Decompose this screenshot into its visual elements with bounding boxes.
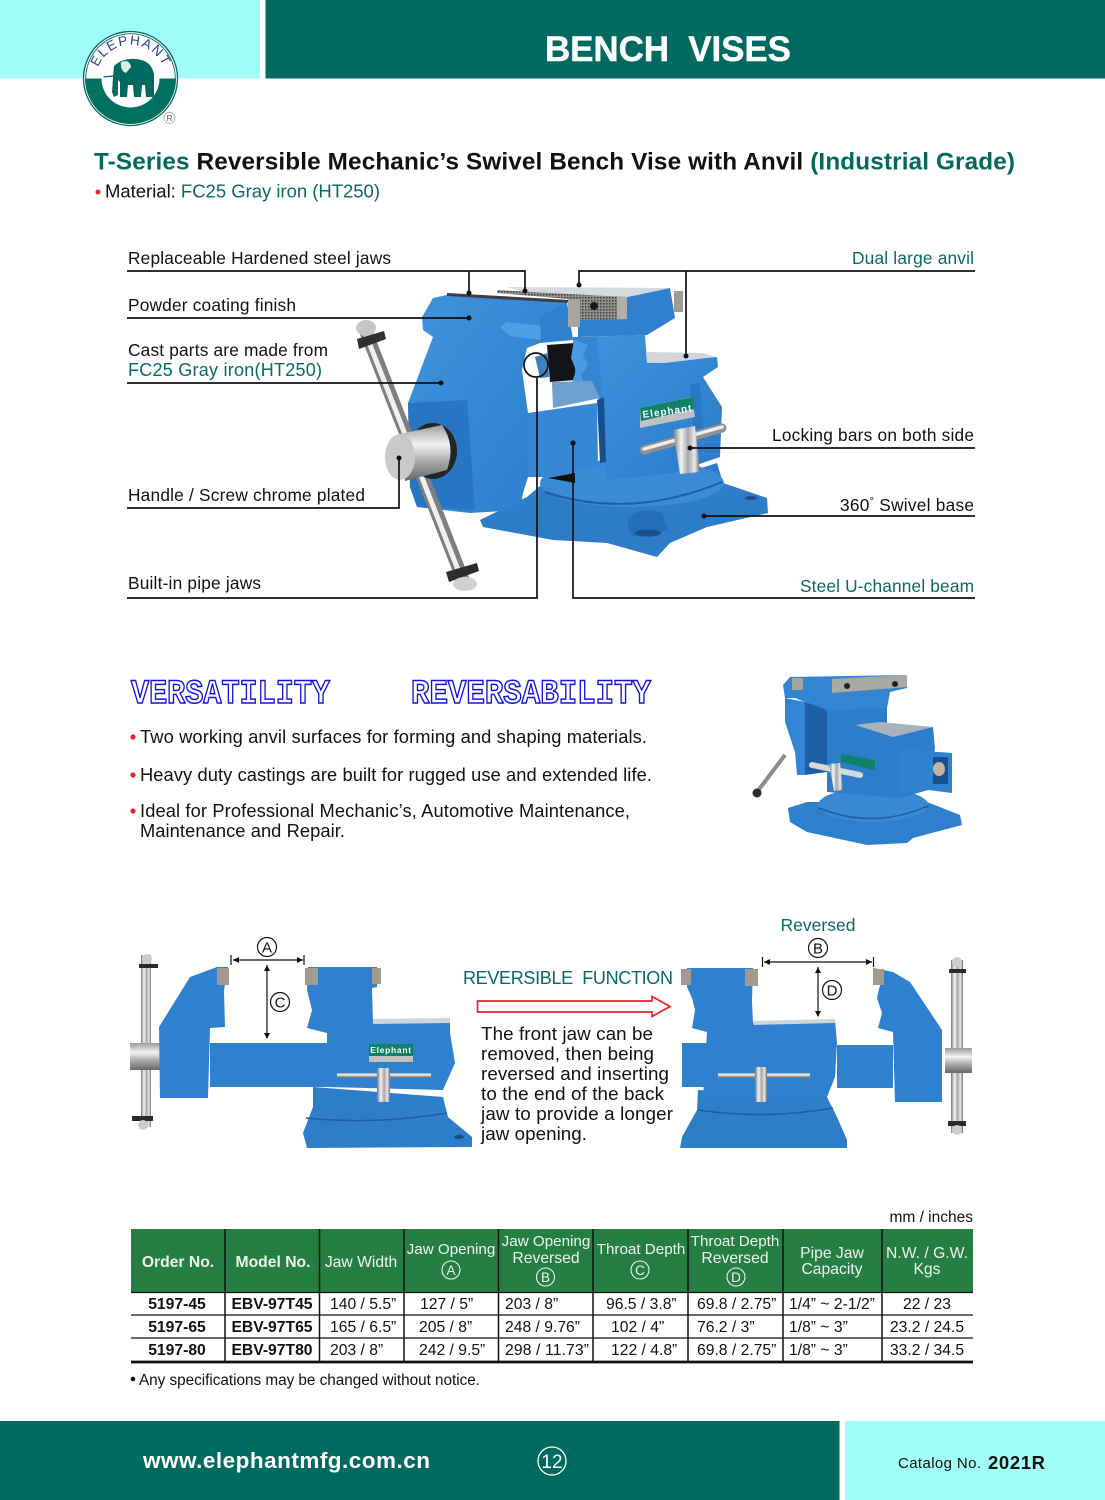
row 5197-80 xyxy=(148,1342,964,1359)
row 5197-80: 5197-80 xyxy=(148,1342,206,1359)
reversible explanation text: removed, then being xyxy=(481,1043,654,1064)
dimension: jaw opening a and throat c: C xyxy=(275,994,286,1012)
table header: Reversed xyxy=(512,1250,580,1267)
main product photo: bench vise xyxy=(356,287,768,591)
back jaw block xyxy=(578,288,675,337)
heading: versatility reversability xyxy=(131,676,652,714)
table header: A xyxy=(446,1263,456,1278)
callout: replaceable jaws xyxy=(127,248,528,296)
handle xyxy=(951,960,963,1133)
table header: Pipe Jaw xyxy=(800,1245,864,1262)
front jaw xyxy=(159,967,228,1098)
steel jaw face xyxy=(497,290,627,320)
row 5197-45: 140 / 5.5” xyxy=(330,1296,396,1313)
material line: Material: FC25 Gray iron (HT250) xyxy=(105,180,380,202)
row 5197-65: 23.2 / 24.5 xyxy=(890,1319,964,1336)
beam xyxy=(552,381,600,408)
callout: cast parts: FC25 Gray iron(HT250) xyxy=(128,360,322,380)
logo: elephant badge: R xyxy=(167,114,173,123)
callout: handle and screw xyxy=(127,456,402,508)
base xyxy=(303,1087,472,1148)
table header: Model No. xyxy=(236,1254,310,1271)
row 5197-65: 1/8” ~ 3” xyxy=(789,1319,848,1336)
diagram: vise normal position xyxy=(130,954,472,1148)
callout: swivel base: Swivel base xyxy=(874,495,974,515)
row 5197-45: 203 / 8” xyxy=(505,1296,558,1313)
reversible function heading: REVERSIBLE FUNCTION xyxy=(463,968,673,988)
black wedge xyxy=(548,473,575,483)
table header: N.W. / G.W. xyxy=(886,1245,968,1262)
dimension: jaw opening a and throat c: A xyxy=(262,940,272,956)
base xyxy=(680,1090,847,1148)
screw hub xyxy=(409,423,457,479)
row 5197-45: 5197-45 xyxy=(148,1296,206,1313)
header band xyxy=(0,0,1105,78)
handle rod and knobs xyxy=(366,332,463,580)
table header: C xyxy=(635,1263,645,1278)
feature bullet list: Heavy duty castings are built for rugged use and extended life. xyxy=(140,764,652,785)
row 5197-65: 248 / 9.76” xyxy=(505,1319,580,1336)
table header: Kgs xyxy=(913,1261,941,1278)
logo: elephant badge: ELEPHANT xyxy=(90,35,171,66)
row 5197-45 xyxy=(148,1296,951,1313)
reversible explanation text: jaw to provide a longer xyxy=(480,1103,673,1124)
rear body xyxy=(583,335,722,480)
row 5197-80: 298 / 11.73” xyxy=(505,1342,589,1359)
title: T-Series Reversible Mechanic’s Swivel Bench Vise with Anvil (Industrial Grade) xyxy=(94,148,1015,176)
row 5197-80: 122 / 4.8” xyxy=(611,1342,677,1359)
locking bar xyxy=(644,428,722,450)
table grid xyxy=(131,1229,973,1362)
logo: elephant badge xyxy=(82,30,178,126)
row 5197-45: 96.5 / 3.8” xyxy=(606,1296,677,1313)
callout: dual anvil xyxy=(576,248,975,358)
table header: Capacity xyxy=(801,1261,863,1278)
row 5197-80: EBV-97T80 xyxy=(231,1342,313,1359)
table header: B xyxy=(541,1270,550,1285)
callout: powder coating: Powder coating finish xyxy=(128,295,296,315)
handle xyxy=(141,955,151,1127)
dimension: reversed jaw opening b and throat d xyxy=(762,915,874,1017)
row 5197-45: 1/4” ~ 2-1/2” xyxy=(789,1296,875,1313)
diagram: vise reversed position xyxy=(680,957,972,1148)
table header: Order No. xyxy=(142,1254,214,1271)
table header: Reversed xyxy=(701,1250,769,1267)
callout: replaceable jaws: Replaceable Hardened steel jaws xyxy=(128,248,391,268)
base xyxy=(480,463,768,557)
reversible explanation text: jaw opening. xyxy=(480,1123,587,1144)
callout: u-channel beam xyxy=(570,440,975,598)
front jaw xyxy=(873,968,942,1102)
arrow: red outline xyxy=(478,996,670,1016)
locking bar xyxy=(337,1073,431,1078)
photo: vise rear view xyxy=(752,675,962,845)
units note: mm / inches xyxy=(889,1209,973,1226)
callout: pipe jaws xyxy=(127,353,548,598)
specifications note: Any specifications may be changed without notice. xyxy=(139,1372,480,1389)
table header: Jaw Width xyxy=(325,1254,397,1271)
row 5197-80: 69.8 / 2.75” xyxy=(697,1342,776,1359)
nameplate xyxy=(640,397,695,428)
feature bullet list: Two working anvil surfaces for forming and shaping materials. xyxy=(140,726,647,747)
callout: powder coating xyxy=(127,295,472,320)
front jaw xyxy=(408,295,573,513)
reversible explanation text: to the end of the back xyxy=(481,1083,665,1104)
feature bullet list: Maintenance and Repair. xyxy=(140,820,345,841)
main product photo: bench vise: Elephant xyxy=(642,403,693,421)
beam xyxy=(210,1043,327,1087)
table header xyxy=(131,1229,973,1292)
diagram: vise normal position: Elephant xyxy=(370,1045,412,1055)
reversible explanation text: reversed and inserting xyxy=(481,1063,669,1084)
row 5197-45: 22 / 23 xyxy=(903,1296,951,1313)
callout: swivel base: ° xyxy=(870,496,874,508)
callout: swivel base xyxy=(702,495,975,518)
catalog number: Catalog No. xyxy=(898,1455,981,1472)
dimension: jaw opening a and throat c xyxy=(231,938,304,1039)
feature bullet list: Ideal for Professional Mechanic’s, Automotive Maintenance, xyxy=(140,800,630,821)
callout: u-channel beam: Steel U-channel beam xyxy=(800,576,974,596)
page number: 12 xyxy=(541,1452,563,1473)
heading: versatility reversability: REVERSABILITY xyxy=(411,676,652,714)
specifications table xyxy=(131,1229,973,1362)
dimension: reversed jaw opening b and throat d: D xyxy=(827,982,838,1000)
row 5197-65 xyxy=(148,1319,964,1336)
row 5197-65: 205 / 8” xyxy=(419,1319,472,1336)
row 5197-65: 5197-65 xyxy=(148,1319,206,1336)
callout: locking bars: Locking bars on both side xyxy=(772,425,974,445)
table header: Throat Depth xyxy=(597,1241,685,1258)
table header: D xyxy=(731,1270,741,1285)
row 5197-80: 33.2 / 34.5 xyxy=(890,1342,964,1359)
row 5197-45: 69.8 / 2.75” xyxy=(697,1296,776,1313)
callout: locking bars xyxy=(688,425,975,450)
row 5197-80: 203 / 8” xyxy=(330,1342,383,1359)
footer band xyxy=(0,1421,1105,1500)
callouts left xyxy=(127,248,975,598)
heading: bench vises: BENCH VISES xyxy=(545,30,791,69)
row 5197-80: 242 / 9.5” xyxy=(419,1342,485,1359)
callout: cast parts xyxy=(127,340,444,386)
locking bar xyxy=(718,1073,810,1078)
callout: dual anvil: Dual large anvil xyxy=(852,248,974,268)
reversible explanation text xyxy=(480,1023,673,1144)
row 5197-65: 165 / 6.5” xyxy=(330,1319,396,1336)
website: www.elephantmfg.com.cn xyxy=(142,1448,430,1473)
table header: Jaw Opening xyxy=(502,1233,590,1250)
body xyxy=(687,968,837,1097)
row 5197-65: EBV-97T65 xyxy=(231,1319,313,1336)
row 5197-65: 76.2 / 3” xyxy=(697,1319,755,1336)
dimension: reversed jaw opening b and throat d: Reversed xyxy=(781,915,855,935)
callout: pipe jaws: Built-in pipe jaws xyxy=(128,573,261,593)
beams xyxy=(682,1043,707,1087)
table header: Throat Depth xyxy=(691,1233,779,1250)
row 5197-45: 127 / 5” xyxy=(420,1296,473,1313)
callout: handle and screw: Handle / Screw chrome plated xyxy=(128,485,365,505)
nameplate xyxy=(369,1044,413,1056)
body xyxy=(307,967,455,1090)
footer band: 2021R xyxy=(988,1452,1045,1473)
row 5197-45: EBV-97T45 xyxy=(231,1296,313,1313)
dimension: reversed jaw opening b and throat d: B xyxy=(813,940,823,958)
reversible explanation text: The front jaw can be xyxy=(481,1023,653,1044)
row 5197-80: 1/8” ~ 3” xyxy=(789,1342,848,1359)
page number xyxy=(538,1447,566,1475)
callout: swivel base: 360 xyxy=(840,495,869,515)
heading: versatility reversability: VERSATILITY xyxy=(131,676,331,714)
row 5197-65: 102 / 4” xyxy=(611,1319,664,1336)
table header: Jaw Opening xyxy=(407,1241,495,1258)
feature bullet list xyxy=(130,726,652,841)
callout: cast parts: Cast parts are made from xyxy=(128,340,328,360)
